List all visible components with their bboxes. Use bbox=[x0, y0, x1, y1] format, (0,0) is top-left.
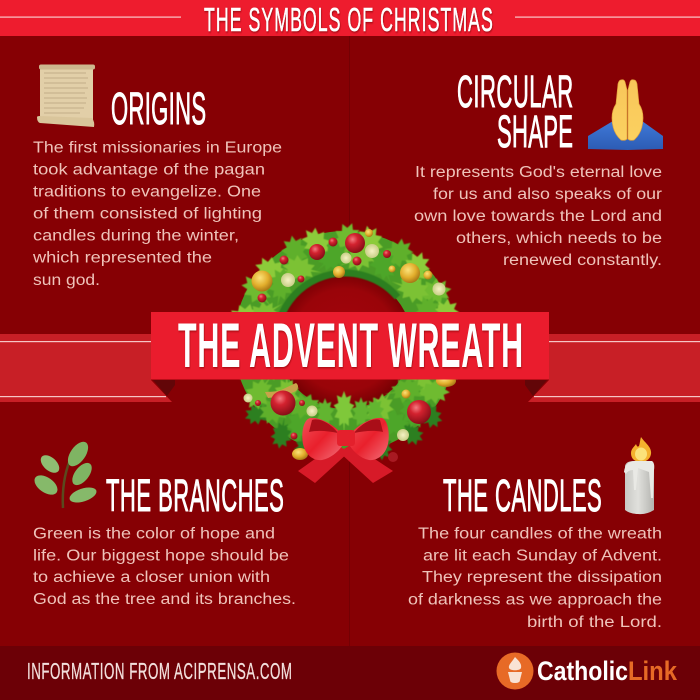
text block: circular shape bbox=[414, 164, 662, 269]
wreath bow bbox=[298, 418, 393, 483]
text block: the candles: The four candles of the wreath bbox=[418, 526, 662, 542]
text block: origins: traditions to evangelize. One bbox=[33, 184, 261, 200]
wreath leaves bbox=[226, 219, 465, 463]
text block: circular shape: others, which needs to be bbox=[456, 230, 662, 247]
panel: the branches bbox=[31, 438, 296, 608]
text block: circular shape: It represents God's eternal love bbox=[415, 164, 662, 181]
text block: the branches bbox=[33, 526, 296, 608]
logo: CatholicLink bbox=[496, 652, 678, 690]
text block: the candles bbox=[408, 526, 662, 631]
text block: circular shape: for us and also speaks of our bbox=[433, 186, 662, 203]
panel: the candles bbox=[408, 437, 662, 631]
text block: circular shape: own love towards the Lord and bbox=[414, 208, 662, 225]
panel: circular shape bbox=[414, 66, 663, 269]
ribbon: left tail bbox=[0, 334, 172, 402]
source credit: INFORMATION FROM ACIPRENSA.COM bbox=[27, 658, 292, 684]
title banner: THE ADVENT WREATH bbox=[178, 310, 523, 381]
heading: circular shape: CIRCULAR bbox=[457, 66, 573, 117]
header bar bbox=[0, 0, 700, 38]
text block: the branches: life. Our biggest hope should be bbox=[33, 548, 289, 564]
logo: CatholicLink: Catholic bbox=[537, 656, 628, 686]
icon: candle bbox=[624, 437, 654, 514]
icon: green branch bbox=[31, 438, 98, 508]
icon: praying hands bbox=[588, 80, 663, 150]
ribbon: right tail bbox=[528, 334, 700, 402]
header bar: THE SYMBOLS OF CHRISTMAS bbox=[204, 1, 493, 38]
wreath bbox=[226, 219, 465, 483]
heading: the branches: THE BRANCHES bbox=[106, 470, 284, 521]
text block: circular shape: renewed constantly. bbox=[503, 252, 662, 269]
panel: origins bbox=[32, 64, 282, 289]
text block: origins: The first missionaries in Europe bbox=[33, 140, 282, 156]
text block: the candles: They represent the dissipation bbox=[422, 569, 662, 586]
heading: circular shape: SHAPE bbox=[497, 106, 573, 157]
text block: origins: which represented the bbox=[32, 250, 212, 266]
text block: the branches: to achieve a closer union with bbox=[33, 569, 270, 586]
text block: origins: of them consisted of lighting bbox=[33, 206, 262, 222]
heading: origins: ORIGINS bbox=[111, 83, 206, 134]
heading: the candles: THE CANDLES bbox=[443, 470, 602, 521]
wreath ornaments bbox=[244, 229, 456, 462]
text block: origins: sun god. bbox=[33, 272, 100, 289]
footer bar bbox=[0, 646, 700, 700]
icon: parchment scroll bbox=[37, 64, 95, 127]
text block: origins: candles during the winter, bbox=[33, 228, 239, 244]
text block: origins: took advantage of the pagan bbox=[33, 162, 265, 178]
text block: the branches: Green is the color of hope and bbox=[33, 526, 275, 542]
text block: the candles: of darkness as we approach the bbox=[408, 592, 662, 608]
logo: CatholicLink: Link bbox=[628, 656, 678, 686]
heading: circular shape bbox=[457, 66, 573, 157]
text block: the branches: God as the tree and its branches. bbox=[33, 591, 296, 608]
text block: origins bbox=[32, 140, 282, 289]
text block: the candles: are lit each Sunday of Advent. bbox=[423, 548, 662, 564]
text block: the candles: birth of the Lord. bbox=[527, 614, 662, 631]
